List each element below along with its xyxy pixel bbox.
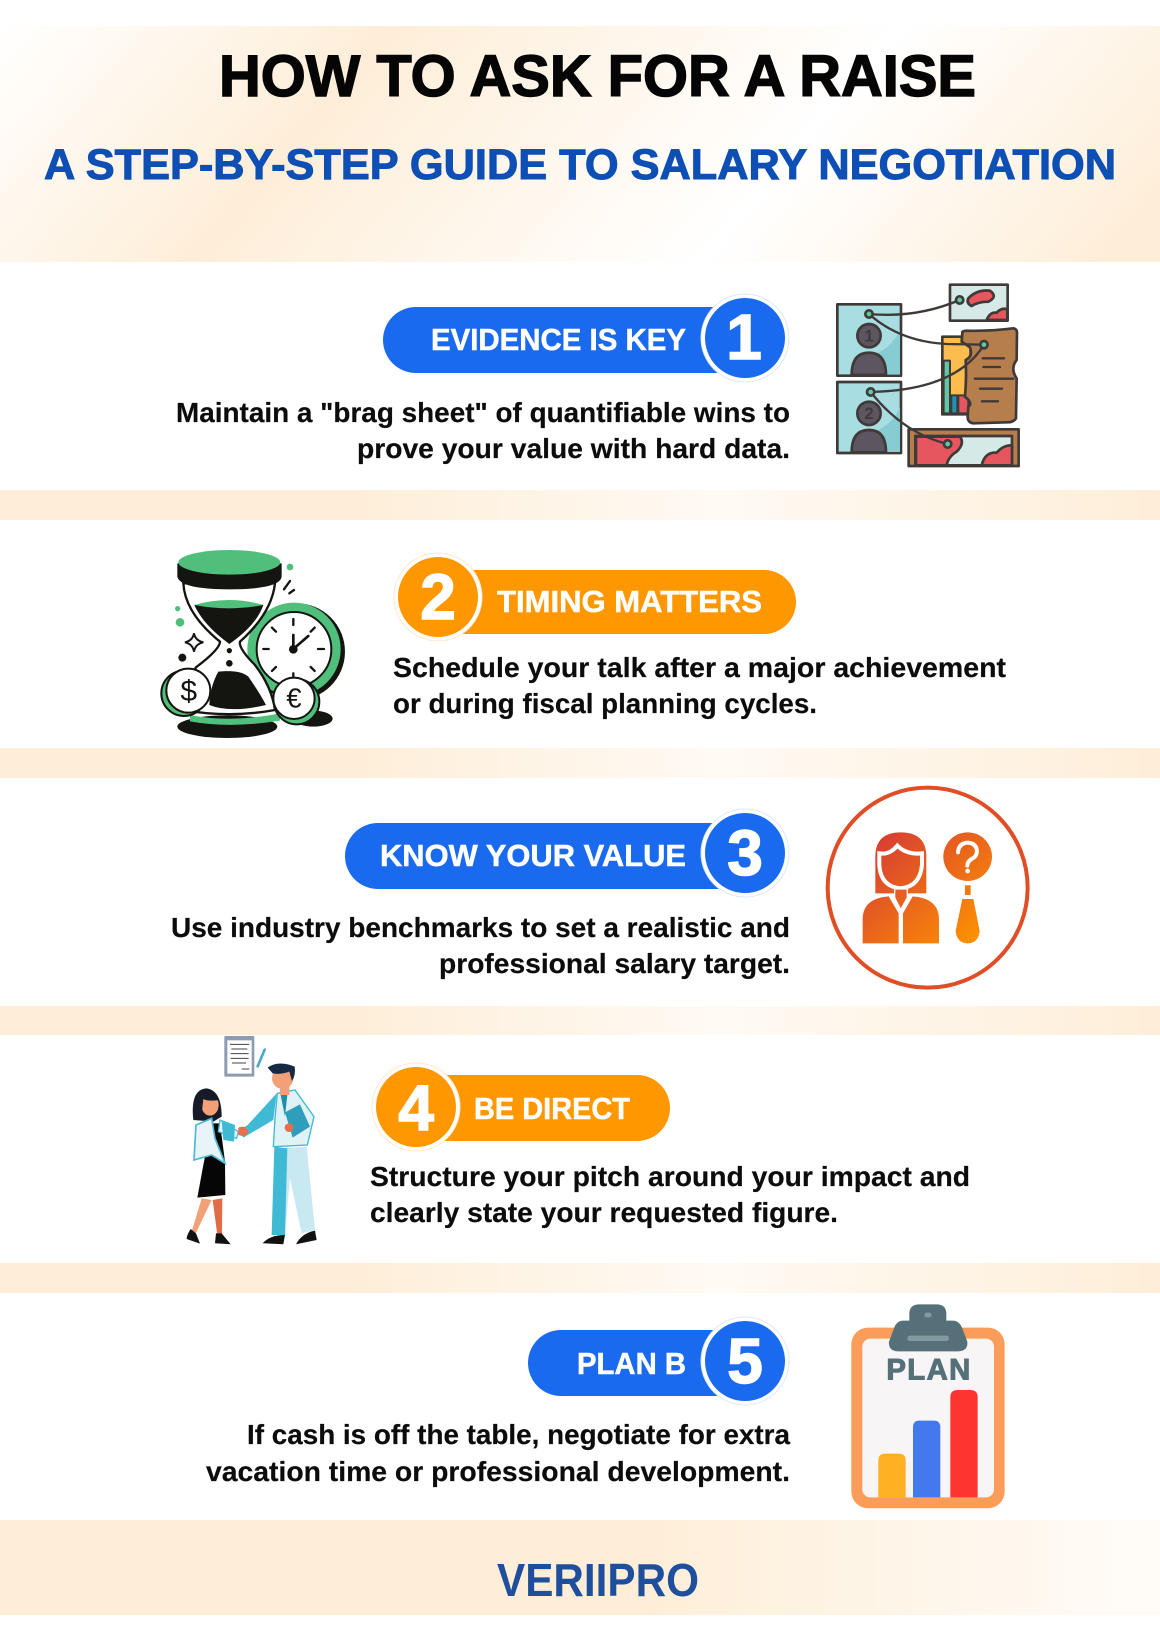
step 4 description <box>370 1161 970 1228</box>
step 5 description: If cash is off the table, negotiate for extra <box>247 1419 790 1450</box>
step 5 pill heading <box>528 1317 789 1405</box>
step 5 panel <box>206 1304 1005 1508</box>
step 3 pill heading <box>345 809 789 897</box>
step 3 pill heading: 3 <box>727 817 763 889</box>
step 2 pill heading: 2 <box>420 561 456 633</box>
icon: evidence board: 1 <box>864 326 874 345</box>
step 1 pill heading: EVIDENCE IS KEY <box>431 322 686 357</box>
step 4 pill heading: BE DIRECT <box>474 1091 630 1126</box>
step 4 pill heading <box>372 1063 670 1151</box>
step 5 description: vacation time or professional development. <box>206 1456 790 1487</box>
step 4 panel <box>187 1036 970 1244</box>
step 2 description <box>393 652 1006 719</box>
icon: evidence board: 2 <box>864 404 874 423</box>
step 2 pill heading <box>394 553 796 641</box>
icon: hourglass, clock and coins: € <box>286 683 302 714</box>
step 4 description: Structure your pitch around your impact and <box>370 1161 970 1192</box>
header band <box>0 26 1160 262</box>
step 3 description <box>171 912 790 979</box>
step 4 pill heading: 4 <box>398 1072 434 1144</box>
icon: person and question mark <box>828 788 1028 988</box>
step 2 description: Schedule your talk after a major achievement <box>393 652 1006 683</box>
title: HOW TO ASK FOR A RAISE <box>219 44 976 109</box>
step 3 panel <box>171 788 1028 988</box>
footer band <box>0 1520 1160 1615</box>
step 1 pill heading: 1 <box>726 301 762 373</box>
icon: hourglass, clock and coins: $ <box>180 675 197 708</box>
step 1 description: Maintain a "brag sheet" of quantifiable wins to <box>176 397 790 428</box>
footer brand name: VERIIPRO <box>497 1554 699 1606</box>
step 3 pill heading: KNOW YOUR VALUE <box>380 838 686 873</box>
step 1 panel <box>176 285 1019 466</box>
step 1 pill heading <box>383 294 789 382</box>
step 5 pill heading: 5 <box>727 1325 763 1397</box>
icon: hourglass, clock and coins <box>161 550 345 738</box>
step 2 description: or during fiscal planning cycles. <box>393 688 817 719</box>
step 3 description: Use industry benchmarks to set a realistic and <box>171 912 790 943</box>
step 5 pill heading: PLAN B <box>577 1346 686 1381</box>
subtitle: A STEP-BY-STEP GUIDE TO SALARY NEGOTIATION <box>44 141 1116 189</box>
icon: plan clipboard <box>851 1304 1005 1508</box>
step 2 panel <box>161 550 1006 738</box>
step 5 description <box>206 1419 790 1487</box>
icon: plan clipboard: PLAN <box>886 1353 970 1386</box>
step 1 description <box>176 397 790 464</box>
icon: business handshake <box>187 1036 317 1244</box>
step 4 description: clearly state your requested figure. <box>370 1197 838 1228</box>
step 1 description: prove your value with hard data. <box>357 433 790 464</box>
icon: evidence board <box>837 285 1019 466</box>
step 2 pill heading: TIMING MATTERS <box>497 584 762 619</box>
step 3 description: professional salary target. <box>439 948 790 979</box>
